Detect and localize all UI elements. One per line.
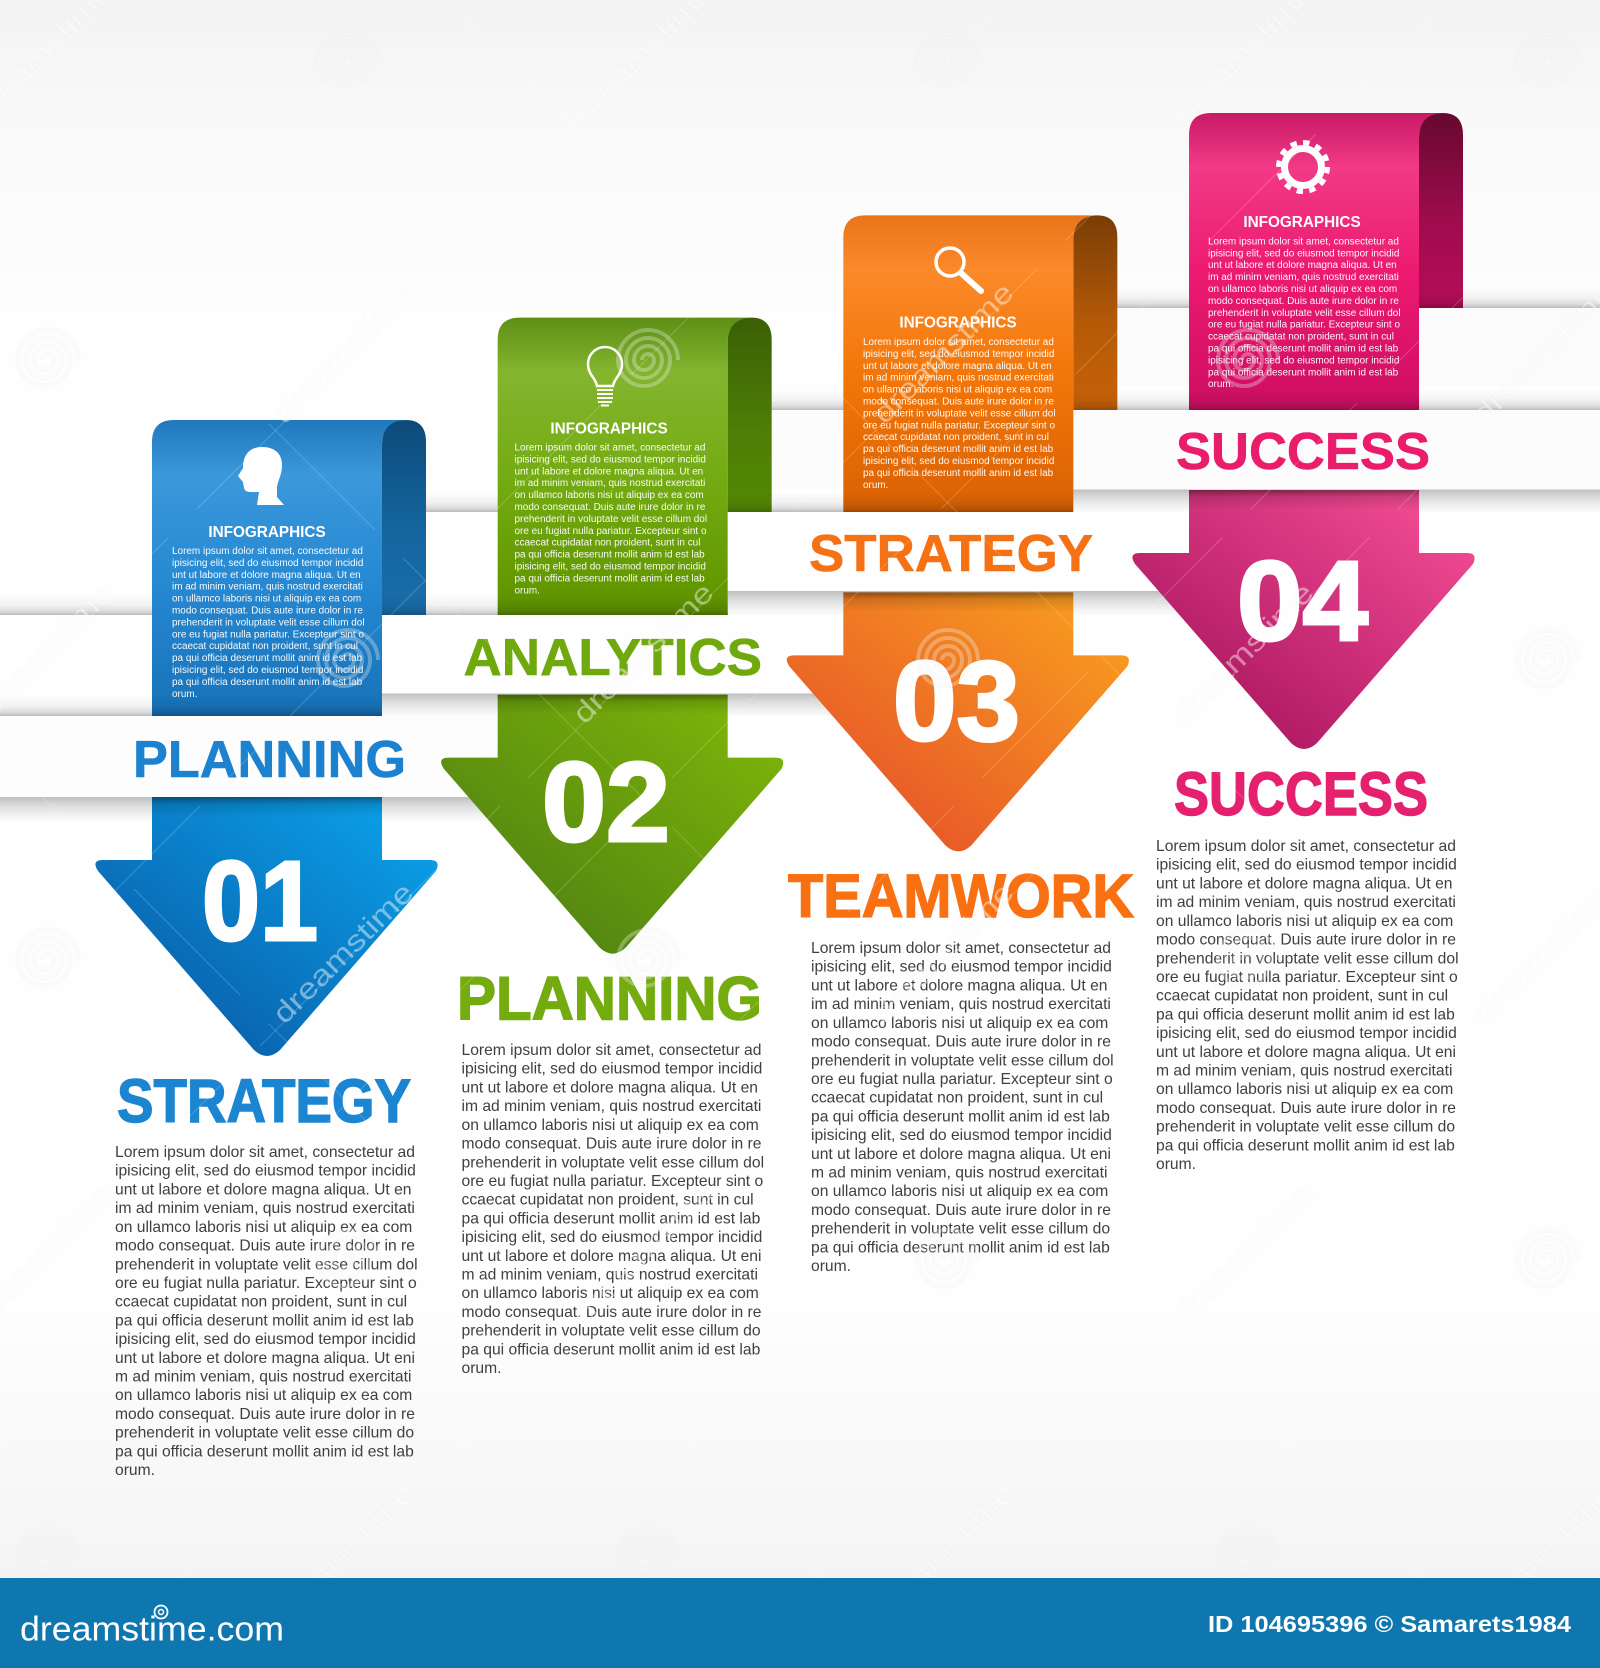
panel text: 04: ipisicing elit, sed do eiusmod tempor incidid <box>1208 248 1399 259</box>
arrow 03: 03 <box>893 638 1020 764</box>
band: STRATEGY: STRATEGY <box>809 525 1093 583</box>
watermark lattice and stamps: dreamstime <box>867 877 1020 1030</box>
text block: column 1: pa qui officia deserunt mollit anim id est lab <box>115 1443 414 1460</box>
panel text: 02 <box>514 347 707 596</box>
text block: column 3: on ullamco laboris nisi ut aliquip ex ea com <box>811 1015 1108 1032</box>
panel text: 04: pa qui officia deserunt mollit anim id est lab <box>1208 367 1399 378</box>
panel text: 02: Lorem ipsum dolor sit amet, consectetur ad <box>514 442 705 454</box>
panel text: 03: pa qui officia deserunt mollit anim id est lab <box>863 468 1054 479</box>
text block: column 3: ccaecat cupidatat non proident, sunt in cul <box>811 1090 1103 1107</box>
text block: column 2: on ullamco laboris nisi ut aliquip ex ea com <box>462 1285 759 1302</box>
icon: head silhouette <box>238 447 284 505</box>
icon: magnifying glass <box>936 248 981 291</box>
text block: column 3: on ullamco laboris nisi ut aliquip ex ea com <box>811 1183 1108 1200</box>
text block: column 3: orum. <box>811 1258 851 1275</box>
ribbon flap: 02 <box>728 318 772 538</box>
band: PLANNING: PLANNING <box>133 731 406 789</box>
panel: ribbon front 03 <box>843 215 1097 535</box>
panel text: 03: on ullamco laboris nisi ut aliquip ex ea com <box>863 385 1052 396</box>
panel text: 04: on ullamco laboris nisi ut aliquip ex ea com <box>1208 284 1397 295</box>
watermark lattice and stamps: dreamstime <box>1167 1177 1320 1330</box>
band: SUCCESS: SUCCESS <box>1176 423 1430 481</box>
panel text: 04: INFOGRAPHICS <box>1243 214 1361 231</box>
heading: SUCCESS: SUCCESS <box>1174 760 1428 828</box>
text block: column 1: on ullamco laboris nisi ut aliquip ex ea com <box>115 1219 412 1236</box>
text block: column 3: modo consequat. Duis aute irure dolor in re <box>811 1034 1111 1051</box>
band: ANALYTICS <box>0 595 850 716</box>
panel text: 03: unt ut labore et dolore magna aliqua. Ut en <box>863 361 1052 372</box>
text block: column 2: ipisicing elit, sed do eiusmod tempor incidid <box>462 1229 762 1246</box>
text block: column 2: ccaecat cupidatat non proident, sunt in cul <box>462 1192 754 1209</box>
panel text: 01: Lorem ipsum dolor sit amet, consectetur ad <box>172 546 363 557</box>
watermark lattice and stamps: dreamstime <box>1467 877 1600 1030</box>
panel text: 04: modo consequat. Duis aute irure dolor in re <box>1208 296 1399 307</box>
text block: column 1: ipisicing elit, sed do eiusmod tempor incidid <box>115 1163 416 1180</box>
text block: column 2: m ad minim veniam, quis nostrud exercitati <box>462 1267 758 1284</box>
text block: column 1: modo consequat. Duis aute irure dolor in re <box>115 1238 415 1255</box>
arrow 02: 02 <box>542 739 670 865</box>
watermark lattice and stamps: dreamstime <box>567 0 720 130</box>
arrow 02 <box>441 695 783 954</box>
ribbon flap: 04 <box>1419 113 1463 333</box>
text block: column 4: pa qui officia deserunt mollit anim id est lab <box>1156 1137 1455 1154</box>
panel text: 04: pa qui officia deserunt mollit anim id est lab <box>1208 344 1399 354</box>
panel text: 01 <box>172 447 365 700</box>
text block: column 2: Lorem ipsum dolor sit amet, consectetur ad <box>462 1042 761 1059</box>
text block: column 2: on ullamco laboris nisi ut aliquip ex ea com <box>462 1117 759 1134</box>
panel: ribbon front 04 <box>1189 113 1443 433</box>
text block: column 4: prehenderit in voluptate velit esse cillum do <box>1156 1119 1455 1136</box>
panel text: 02: ccaecat cupidatat non proident, sunt in cul <box>514 538 700 549</box>
panel text: 04: im ad minim veniam, quis nostrud exercitati <box>1208 272 1399 283</box>
panel text: 01: im ad minim veniam, quis nostrud exercitati <box>172 582 363 593</box>
text block: column 4: unt ut labore et dolore magna aliqua. Ut eni <box>1156 1044 1456 1061</box>
panel text: 03: INFOGRAPHICS <box>899 314 1017 332</box>
text block: column 4: prehenderit in voluptate velit esse cillum dol <box>1156 950 1459 967</box>
watermark lattice and stamps: dreamstime <box>1167 577 1320 730</box>
watermark lattice and stamps: dreamstime <box>867 1477 1020 1630</box>
text block: column 1: im ad minim veniam, quis nostrud exercitati <box>115 1200 415 1217</box>
arrow 04 <box>1132 490 1475 749</box>
text block: column 3: Lorem ipsum dolor sit amet, consectetur ad <box>811 940 1111 957</box>
text block: column 3: ore eu fugiat nulla pariatur. Excepteur sint o <box>811 1071 1113 1088</box>
text block: column 2: unt ut labore et dolore magna aliqua. Ut eni <box>462 1248 761 1265</box>
panel text: 04: unt ut labore et dolore magna aliqua. Ut en <box>1208 260 1397 271</box>
panel text: 01: on ullamco laboris nisi ut aliquip ex ea com <box>172 594 361 605</box>
panel text: 01: modo consequat. Duis aute irure dolor in re <box>172 606 363 616</box>
text block: column 3: unt ut labore et dolore magna aliqua. Ut eni <box>811 1146 1111 1163</box>
band: STRATEGY <box>415 492 1195 615</box>
text block: column 2: prehenderit in voluptate velit esse cillum dol <box>462 1154 764 1171</box>
panel text: 04: ccaecat cupidatat non proident, sunt in cul <box>1208 332 1394 343</box>
text block: column 2: ore eu fugiat nulla pariatur. Excepteur sint o <box>462 1173 764 1190</box>
panel text: 02: unt ut labore et dolore magna aliqua. Ut en <box>514 466 703 477</box>
text block: column 1: ipisicing elit, sed do eiusmod tempor incidid <box>115 1331 416 1348</box>
text block: column 3: ipisicing elit, sed do eiusmod tempor incidid <box>811 959 1112 976</box>
text block: column 1: m ad minim veniam, quis nostrud exercitati <box>115 1369 411 1386</box>
arrow 03 <box>787 592 1129 851</box>
text block: column 1: prehenderit in voluptate velit esse cillum do <box>115 1425 414 1442</box>
heading: PLANNING: PLANNING <box>457 964 762 1032</box>
text block: column 2: ipisicing elit, sed do eiusmod tempor incidid <box>462 1061 762 1078</box>
watermark lattice and stamps: dreamstime <box>1167 0 1320 130</box>
panel text: 04: orum. <box>1208 379 1233 390</box>
panel text: 02: orum. <box>514 585 540 596</box>
band: ANALYTICS: ANALYTICS <box>464 629 762 687</box>
text block: column 4: on ullamco laboris nisi ut aliquip ex ea com <box>1156 913 1453 930</box>
panel text: 01: INFOGRAPHICS <box>208 524 326 541</box>
panel text: 03: Lorem ipsum dolor sit amet, consectetur ad <box>863 337 1054 348</box>
text block: column 2: unt ut labore et dolore magna aliqua. Ut en <box>462 1079 758 1096</box>
panel: ribbon front 01 <box>152 420 406 740</box>
text block: column 4: on ullamco laboris nisi ut aliquip ex ea com <box>1156 1081 1453 1098</box>
text block: column 4: modo consequat. Duis aute irure dolor in re <box>1156 932 1456 949</box>
panel text: 04 <box>1208 142 1401 390</box>
text block: column 1: ore eu fugiat nulla pariatur. Excepteur sint o <box>115 1275 417 1292</box>
icon: light bulb <box>588 347 622 406</box>
panel text: 03: orum. <box>863 480 888 491</box>
panel text: 03: ipisicing elit, sed do eiusmod tempor incidid <box>863 456 1054 467</box>
text block: column 4: modo consequat. Duis aute irure dolor in re <box>1156 1100 1456 1117</box>
text block: column 2: modo consequat. Duis aute irure dolor in re <box>462 1304 761 1321</box>
text block: column 1: unt ut labore et dolore magna aliqua. Ut eni <box>115 1350 415 1367</box>
text block: column 1: unt ut labore et dolore magna aliqua. Ut en <box>115 1181 412 1198</box>
text block: column 2: modo consequat. Duis aute irure dolor in re <box>462 1136 761 1153</box>
watermark lattice and stamps: dreamstime <box>567 1177 720 1330</box>
text block: column 3: pa qui officia deserunt mollit anim id est lab <box>811 1108 1110 1125</box>
ribbon flap: 03 <box>1073 215 1117 435</box>
panel text: 02: modo consequat. Duis aute irure dolor in re <box>514 502 706 513</box>
panel text: 02: ipisicing elit, sed do eiusmod tempor incidid <box>514 562 706 572</box>
panel text: 01: pa qui officia deserunt mollit anim id est lab <box>172 653 363 664</box>
text block: column 4: Lorem ipsum dolor sit amet, consectetur ad <box>1156 838 1456 855</box>
heading: STRATEGY: STRATEGY <box>117 1067 411 1135</box>
panel text: 01: ipisicing elit, sed do eiusmod tempor incidid <box>172 558 363 569</box>
text block: column 2: pa qui officia deserunt mollit anim id est lab <box>462 1341 761 1358</box>
panel text: 02: on ullamco laboris nisi ut aliquip ex ea com <box>514 490 704 501</box>
panel text: 01: prehenderit in voluptate velit esse cillum dol <box>172 617 365 628</box>
text block: column 1: pa qui officia deserunt mollit anim id est lab <box>115 1312 414 1329</box>
text block: column 3: unt ut labore et dolore magna aliqua. Ut en <box>811 977 1108 994</box>
ribbon flap: 01 <box>382 420 426 640</box>
white band behind pink ribbon <box>1100 288 1600 386</box>
footer credit: ID 104695396 © Samarets1984 <box>1208 1611 1571 1637</box>
text block: column 1: ccaecat cupidatat non proident, sunt in cul <box>115 1294 407 1311</box>
text block: column 3: modo consequat. Duis aute irure dolor in re <box>811 1202 1111 1219</box>
panel text: 01: ipisicing elit, sed do eiusmod tempor incidid <box>172 665 363 676</box>
panel text: 04: ipisicing elit, sed do eiusmod tempor incidid <box>1208 355 1399 366</box>
text block: column 2: orum. <box>462 1360 501 1377</box>
text block: column 1: prehenderit in voluptate velit esse cillum dol <box>115 1256 418 1273</box>
panel text: 04: ore eu fugiat nulla pariatur. Excepteur sint o <box>1208 320 1400 331</box>
text block: column 4: ipisicing elit, sed do eiusmod tempor incidid <box>1156 857 1457 874</box>
panel text: 03: ipisicing elit, sed do eiusmod tempor incidid <box>863 349 1054 360</box>
text block: column 4: ipisicing elit, sed do eiusmod tempor incidid <box>1156 1025 1457 1042</box>
panel text: 02: pa qui officia deserunt mollit anim id est lab <box>514 550 705 561</box>
text block: column 2: pa qui officia deserunt mollit anim id est lab <box>462 1210 761 1227</box>
panel text: 04: prehenderit in voluptate velit esse cillum dol <box>1208 308 1401 319</box>
text block: column 3: ipisicing elit, sed do eiusmod tempor incidid <box>811 1127 1112 1144</box>
text block: column 1: modo consequat. Duis aute irure dolor in re <box>115 1406 415 1423</box>
panel text: 02: INFOGRAPHICS <box>550 420 668 438</box>
footer logo: dreamstime.com <box>20 1610 284 1648</box>
panel text: 02: prehenderit in voluptate velit esse cillum dol <box>514 514 707 525</box>
panel text: 01: unt ut labore et dolore magna aliqua. Ut en <box>172 570 361 581</box>
band: PLANNING <box>0 696 500 821</box>
panel text: 01: ore eu fugiat nulla pariatur. Excepteur sint o <box>172 629 364 640</box>
panel text: 03: im ad minim veniam, quis nostrud exercitati <box>863 373 1054 384</box>
text block: column 4: ccaecat cupidatat non proident, sunt in cul <box>1156 988 1448 1005</box>
panel text: 03: modo consequat. Duis aute irure dolor in re <box>863 396 1054 408</box>
text block: column 3: pa qui officia deserunt mollit anim id est lab <box>811 1239 1110 1256</box>
text block: column 2: im ad minim veniam, quis nostrud exercitati <box>462 1098 761 1115</box>
watermark lattice and stamps: dreamstime <box>267 277 420 430</box>
band: SUCCESS <box>760 390 1600 512</box>
text block: column 4: m ad minim veniam, quis nostrud exercitati <box>1156 1063 1452 1080</box>
panel text: 02: im ad minim veniam, quis nostrud exercitati <box>514 478 705 489</box>
panel text: 01: ccaecat cupidatat non proident, sunt in cul <box>172 641 358 652</box>
text block: column 3: m ad minim veniam, quis nostrud exercitati <box>811 1165 1107 1182</box>
panel text: 01: orum. <box>172 689 197 700</box>
panel text: 03: ore eu fugiat nulla pariatur. Excepteur sint o <box>863 420 1055 431</box>
watermark lattice and stamps: dreamstime <box>1467 277 1600 430</box>
panel text: 03: prehenderit in voluptate velit esse cillum dol <box>863 408 1056 419</box>
panel text: 03 <box>863 248 1056 491</box>
footer bar <box>0 1578 1600 1668</box>
text block: column 4: orum. <box>1156 1156 1196 1173</box>
panel text: 02: pa qui officia deserunt mollit anim id est lab <box>514 573 705 584</box>
text block: column 3: prehenderit in voluptate velit esse cillum do <box>811 1221 1110 1238</box>
watermark lattice and stamps: dreamstime <box>567 577 720 730</box>
panel text: 04: Lorem ipsum dolor sit amet, consectetur ad <box>1208 236 1399 247</box>
text block: column 3: im ad minim veniam, quis nostrud exercitati <box>811 996 1111 1013</box>
text block: column 4: pa qui officia deserunt mollit anim id est lab <box>1156 1006 1455 1023</box>
text block: column 4: ore eu fugiat nulla pariatur. Excepteur sint o <box>1156 969 1458 986</box>
icon: gear <box>1278 142 1328 192</box>
watermark lattice and stamps: dreamstime <box>267 1477 420 1630</box>
watermark lattice and stamps: dreamstime <box>867 277 1020 430</box>
panel text: 02: ipisicing elit, sed do eiusmod tempor incidid <box>514 454 706 465</box>
arrow 04: 04 <box>1237 538 1368 664</box>
text block: column 1: on ullamco laboris nisi ut aliquip ex ea com <box>115 1387 412 1404</box>
text block: column 1: orum. <box>115 1462 155 1479</box>
text block: column 1: Lorem ipsum dolor sit amet, consectetur ad <box>115 1144 415 1161</box>
text block: column 3: prehenderit in voluptate velit esse cillum dol <box>811 1052 1114 1069</box>
panel text: 02: ore eu fugiat nulla pariatur. Excepteur sint o <box>514 526 707 537</box>
panel text: 01: pa qui officia deserunt mollit anim id est lab <box>172 677 363 688</box>
text block: column 4: im ad minim veniam, quis nostrud exercitati <box>1156 894 1456 911</box>
arrow 01 <box>95 797 438 1056</box>
panel: ribbon front 02 <box>498 318 752 638</box>
text block: column 4: unt ut labore et dolore magna aliqua. Ut en <box>1156 875 1453 892</box>
heading: TEAMWORK: TEAMWORK <box>788 862 1134 930</box>
text block: column 2: prehenderit in voluptate velit esse cillum do <box>462 1323 761 1340</box>
watermark lattice and stamps: dreamstime <box>1467 1477 1600 1630</box>
panel text: 03: pa qui officia deserunt mollit anim id est lab <box>863 444 1054 455</box>
watermark lattice and stamps: dreamstime <box>267 877 420 1030</box>
arrow 01: 01 <box>202 838 318 964</box>
panel text: 03: ccaecat cupidatat non proident, sunt in cul <box>863 432 1049 443</box>
